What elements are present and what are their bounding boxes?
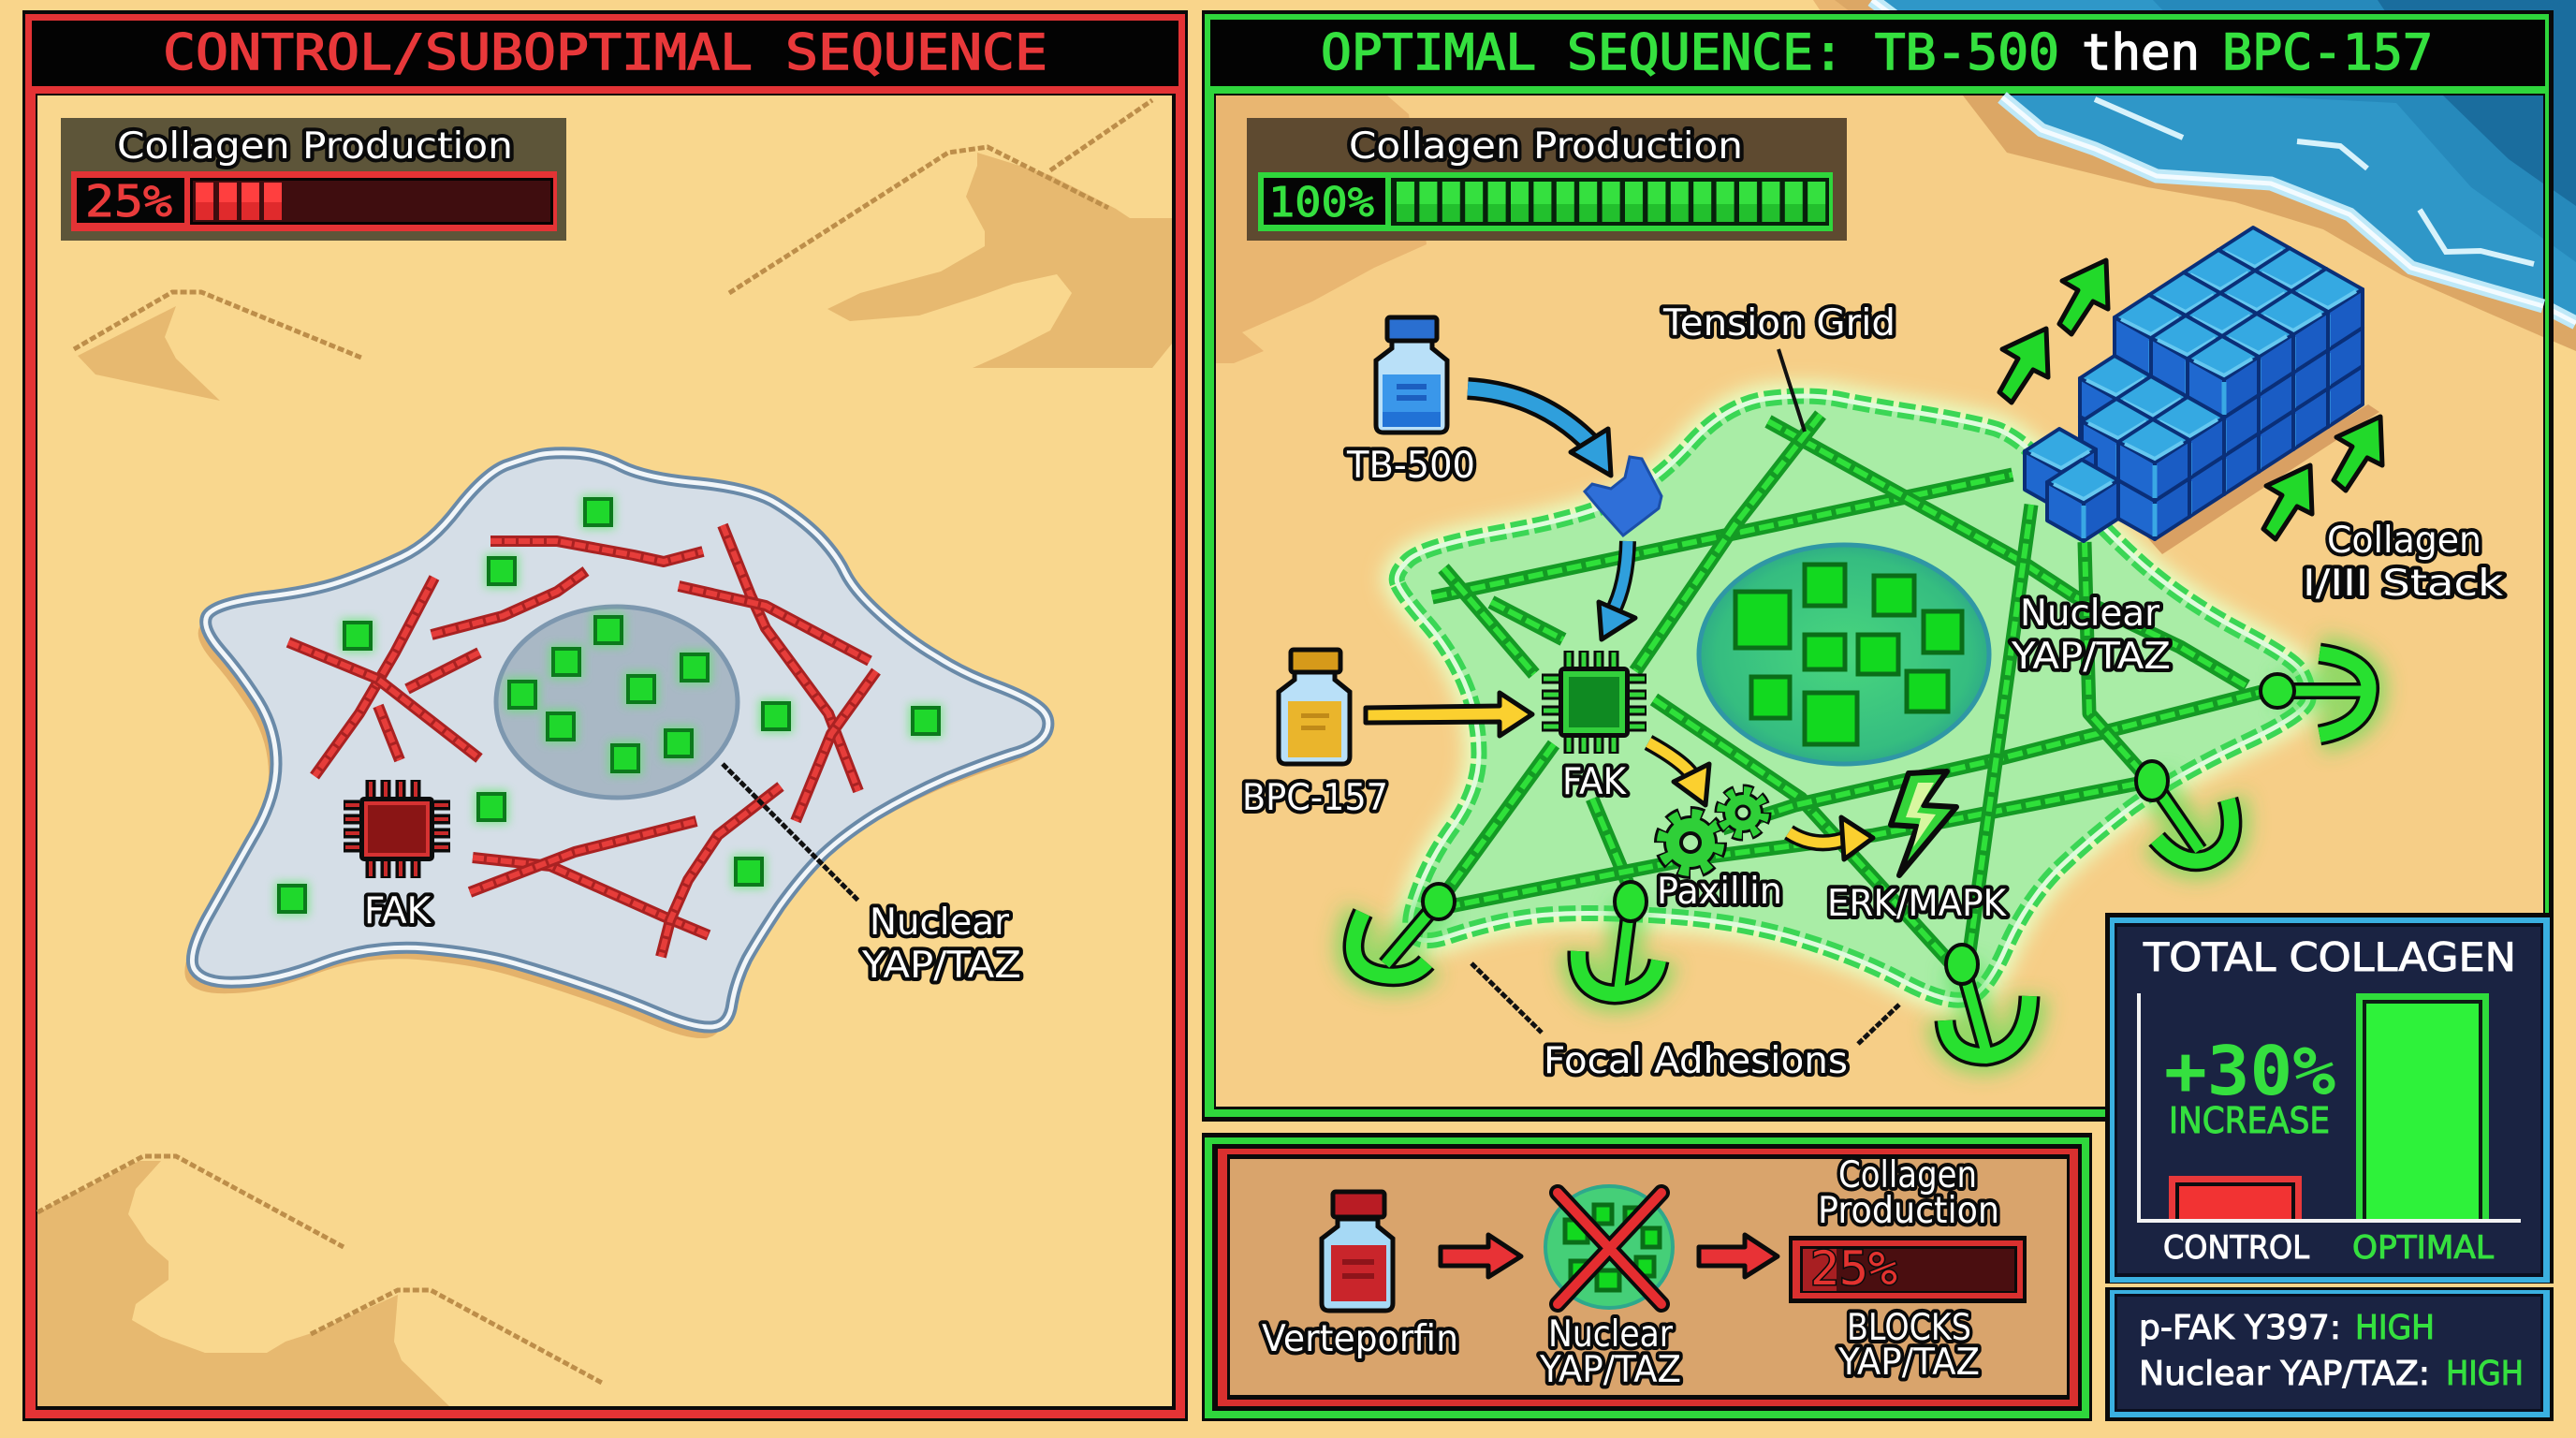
collagen production gauge: 25%: 25%: [85, 176, 172, 227]
green upward arrows: [1999, 260, 2382, 539]
icon: ERK/MAPK lightning bolt: [1891, 771, 1956, 875]
text: nuclear YAP/TAZ high: HIGH: [2446, 1355, 2524, 1393]
collagen stack: blue cubes: [2025, 227, 2379, 554]
collagen production gauge: 25%: Collagen Production: [117, 125, 513, 168]
arrow: FAK to paxillin: [1648, 742, 1709, 805]
icon: TB-500 vial: [1376, 317, 1447, 433]
label: TB-500: TB-500: [1346, 445, 1475, 487]
label: nuclear YAP/TAZ, optimal: YAP/TAZ: [2011, 636, 2171, 678]
label: verteporfin: Verteporfin: [1262, 1318, 1458, 1360]
label: collagen production, block panel: [1818, 1154, 1999, 1232]
arrow: verteporfin to nucleus: [1441, 1235, 1521, 1277]
bar chart: control vs optimal: [2137, 993, 2521, 1223]
arrow: BPC-157 to FAK: [1366, 693, 1532, 736]
tension grid: green actin fibers: [1432, 415, 2265, 964]
panel: verteporfin block: [1202, 1133, 2092, 1421]
icon: BPC-157 vial: [1279, 650, 1350, 764]
label: collagen production, block panel: Collagen: [1838, 1154, 1977, 1196]
label: collagen I/III stack: [2303, 520, 2503, 605]
gauge: blocked collagen 25%: 25%: [1810, 1241, 1897, 1296]
label: BPC-157: BPC-157: [1242, 777, 1388, 819]
label: ERK/MAPK: ERK/MAPK: [1827, 883, 2007, 925]
label: nuclear YAP/TAZ, block panel: [1539, 1313, 1681, 1391]
bar: optimal: [2356, 993, 2489, 1219]
label: focal adhesions: Focal Adhesions: [1544, 1040, 1848, 1082]
bar: control: [2169, 1176, 2302, 1219]
beach and ocean scenery: [1813, 0, 2576, 351]
label: blocks YAP/TAZ: [1837, 1307, 1980, 1384]
cell: weak tension: [184, 453, 1048, 1038]
callout: nuclear YAP/TAZ, control: Nuclear: [870, 902, 1010, 944]
header bar: control: [32, 21, 1178, 86]
panel: optimal sequence: [1202, 10, 2554, 1122]
label: tension grid: Tension Grid: [1662, 302, 1895, 345]
title: control sequence: CONTROL/SUBOPTIMAL SEQUENCE: [163, 24, 1047, 81]
sand background: control: [36, 94, 1176, 1410]
panel: marker status: [2105, 1287, 2554, 1421]
icon: FAK chip, green: [1542, 651, 1647, 754]
arrow: TB-500 to integrin: [1468, 389, 1611, 476]
label: paxillin: Paxillin: [1657, 871, 1782, 913]
label: nuclear YAP/TAZ, block panel: YAP/TAZ: [1539, 1349, 1681, 1391]
icon: blocked nucleus: [1545, 1186, 1673, 1308]
icon: verteporfin vial: [1322, 1192, 1393, 1311]
label: collagen production, block panel: Production: [1818, 1190, 1999, 1232]
collagen production gauge: 100%: 100%: [1268, 179, 1374, 227]
panel: control / suboptimal sequence: [22, 10, 1188, 1421]
text: p-FAK Y397 high: p-FAK Y397:: [2139, 1309, 2341, 1347]
text: p-FAK Y397 high: HIGH: [2355, 1309, 2435, 1347]
stat: +30% increase: +30%: [2164, 1032, 2335, 1110]
arrow: paxillin to ERK/MAPK: [1789, 817, 1873, 859]
axis label: control: CONTROL: [2163, 1229, 2309, 1267]
label: FAK: FAK: [364, 890, 432, 932]
label: blocks YAP/TAZ: BLOCKS: [1847, 1307, 1971, 1349]
nucleus: optimal with YAP/TAZ: [1699, 545, 1989, 764]
nucleus: control: [496, 607, 738, 798]
label: nuclear YAP/TAZ, block panel: Nuclear: [1548, 1313, 1674, 1356]
label: blocks YAP/TAZ: YAP/TAZ: [1837, 1342, 1980, 1384]
label: FAK, optimal: FAK: [1562, 761, 1627, 803]
text: p-FAK Y397 high: [2139, 1309, 2435, 1347]
icon: paxillin gears: [1662, 791, 1764, 871]
title: optimal sequence: BPC-157: [2222, 24, 2433, 81]
icon: FAK chip, red: [344, 780, 450, 878]
collagen production gauge: 100%: [1247, 118, 1847, 241]
collagen production gauge: 25%: [61, 118, 566, 241]
label: nuclear YAP/TAZ, optimal: Nuclear: [2020, 593, 2160, 635]
title: total collagen: TOTAL COLLAGEN: [2143, 934, 2516, 980]
scene: sand and sea, optimal: [1214, 94, 2545, 1109]
title: optimal sequence: then: [2082, 24, 2200, 81]
arrow: nucleus to collagen: [1699, 1235, 1778, 1277]
text: nuclear YAP/TAZ high: Nuclear YAP/TAZ:: [2139, 1355, 2430, 1393]
focal adhesion anchors: [1354, 653, 2369, 1056]
title: optimal sequence: OPTIMAL SEQUENCE: TB-500: [1321, 24, 2059, 81]
gauge: blocked collagen 25%: [1789, 1236, 2027, 1303]
header bar: optimal: [1210, 20, 2545, 86]
label: focal adhesions: [1471, 963, 1899, 1082]
arrow: receptor to FAK: [1599, 541, 1635, 639]
label: collagen I/III stack: Collagen: [2327, 520, 2481, 562]
panel: total collagen: [2105, 913, 2554, 1284]
callout: nuclear YAP/TAZ, control: YAP/TAZ: [861, 945, 1021, 987]
cell: high tension, glowing green: [1354, 396, 2369, 1056]
green YAP/TAZ particles: control: [275, 495, 943, 916]
axis label: optimal: OPTIMAL: [2352, 1229, 2494, 1267]
label: collagen I/III stack: I/III Stack: [2303, 563, 2503, 605]
icon: TB-500 receptor: [1585, 457, 1661, 536]
disorganised red actin fibers: [288, 525, 876, 957]
callout: nuclear YAP/TAZ, control: [723, 764, 1021, 987]
label: nuclear YAP/TAZ, optimal: [2011, 593, 2171, 678]
stat: +30% increase: [2164, 1032, 2335, 1141]
collagen production gauge: 100%: Collagen Production: [1349, 125, 1743, 168]
stat: +30% increase: INCREASE: [2169, 1100, 2330, 1141]
label: tension grid: [1662, 302, 1895, 432]
